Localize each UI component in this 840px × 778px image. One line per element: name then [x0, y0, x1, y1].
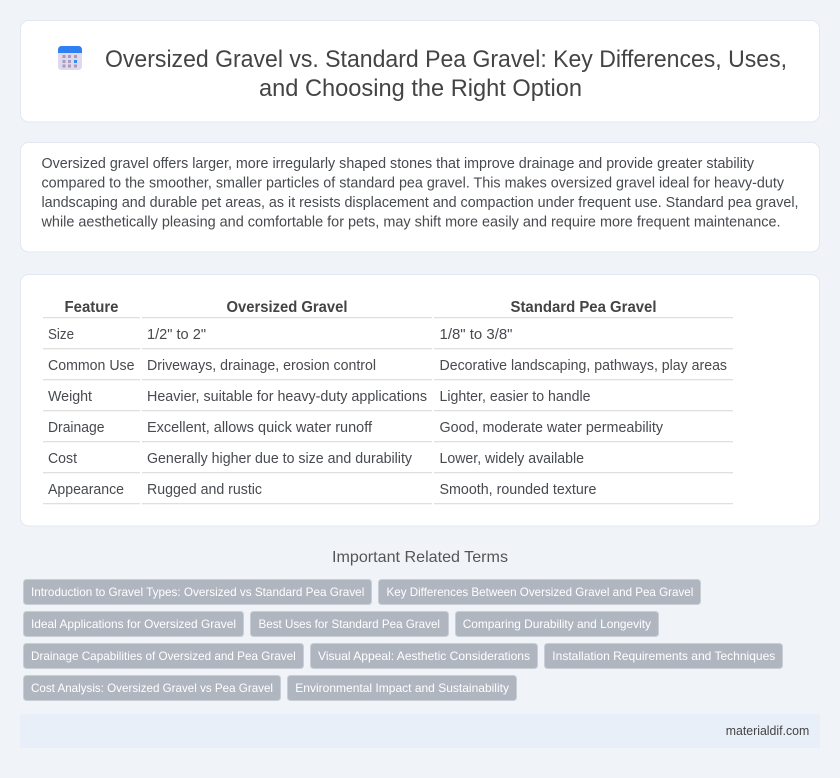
- tag: introduction: Introduction to Gravel Types: Oversized vs Standard Pea Gravel: [31, 585, 364, 599]
- text block: introduction paragraph: Oversized gravel offers larger, more irregularly shaped stones that improve drainage and provide greater stability: [42, 156, 755, 172]
- table row: cost: [48, 451, 584, 467]
- panel: title header: [20, 20, 820, 122]
- table header row: Oversized Gravel: [226, 299, 348, 316]
- footer: [20, 714, 820, 748]
- table header row: [64, 299, 656, 316]
- text block: introduction paragraph: [40, 156, 799, 230]
- tag: introduction: [24, 580, 372, 604]
- tag: ideal applications: [24, 612, 244, 636]
- table row: common use: [48, 358, 727, 374]
- tag: key differences: [378, 580, 700, 604]
- heading: important related terms: Important Related Terms: [332, 549, 508, 566]
- table row: size: 1/8" to 3/8": [440, 327, 512, 343]
- footer: materialdif.com: [726, 724, 809, 738]
- title: [105, 46, 787, 102]
- table row: size: [48, 327, 512, 343]
- table row: appearance: [48, 482, 596, 498]
- text block: introduction paragraph: compared to the smoother, smaller particles of standard pea gravel. This makes oversized gravel ideal for heavy-duty: [42, 176, 785, 192]
- tag: cost analysis: Cost Analysis: Oversized Gravel vs Pea Gravel: [31, 681, 273, 695]
- tag: drainage: Drainage Capabilities of Oversized and Pea Gravel: [31, 649, 296, 663]
- table row: drainage: Excellent, allows quick water runoff: [147, 420, 373, 436]
- table row: common use: Driveways, drainage, erosion control: [147, 358, 376, 374]
- text block: introduction paragraph: while aesthetically pleasing and comfortable for pets, may shift more easily and require more frequent maintenance.: [40, 214, 781, 230]
- table row: weight: Heavier, suitable for heavy-duty applications: [147, 389, 427, 405]
- tag: durability: Comparing Durability and Longevity: [463, 617, 651, 631]
- title: and Choosing the Right Option: [259, 75, 582, 102]
- table row: drainage: [48, 420, 664, 436]
- tag: installation: [544, 644, 782, 668]
- table header row: Standard Pea Gravel: [510, 299, 656, 316]
- table row: drainage: Good, moderate water permeability: [440, 420, 664, 436]
- table row: appearance: Appearance: [48, 482, 124, 498]
- tag: visual appeal: [310, 644, 538, 668]
- tag: environmental impact: Environmental Impact and Sustainability: [295, 681, 509, 695]
- table row: weight: Lighter, easier to handle: [440, 389, 590, 405]
- tag: durability: [456, 612, 658, 636]
- tag: environmental impact: [288, 676, 516, 700]
- panel: comparison table: [20, 274, 820, 526]
- table row: appearance: Rugged and rustic: [147, 482, 262, 498]
- tag: key differences: Key Differences Between Oversized Gravel and Pea Gravel: [386, 585, 693, 599]
- title: Oversized Gravel vs. Standard Pea Gravel: Key Differences, Uses,: [105, 46, 787, 73]
- table row: cost: Cost: [48, 451, 77, 467]
- table row: weight: [48, 389, 590, 405]
- tag: installation: Installation Requirements and Techniques: [552, 649, 775, 663]
- tag: drainage: [24, 644, 304, 668]
- icon: calendar: [58, 46, 82, 70]
- table row: cost: Lower, widely available: [440, 451, 584, 467]
- tag: best uses: Best Uses for Standard Pea Gravel: [258, 617, 440, 631]
- tag: ideal applications: Ideal Applications for Oversized Gravel: [31, 617, 236, 631]
- panel: introduction: [20, 142, 820, 252]
- table row: common use: Common Use: [48, 358, 134, 374]
- tag: visual appeal: Visual Appeal: Aesthetic Considerations: [318, 649, 530, 663]
- tag: best uses: [250, 612, 448, 636]
- text block: introduction paragraph: landscaping and durable pet areas, as it resists displacement and compaction under frequent use. Standard pea gravel,: [42, 195, 798, 211]
- table row: appearance: Smooth, rounded texture: [440, 482, 596, 498]
- table row: cost: Generally higher due to size and durability: [147, 451, 413, 467]
- table row: weight: Weight: [48, 389, 92, 405]
- table row: size: Size: [48, 327, 74, 343]
- table row: drainage: Drainage: [48, 420, 104, 436]
- table row: size: 1/2" to 2": [147, 327, 206, 343]
- tag: cost analysis: [24, 676, 280, 700]
- related terms tags: [24, 580, 782, 700]
- table header row: Feature: [64, 299, 119, 316]
- table row: common use: Decorative landscaping, pathways, play areas: [440, 358, 727, 374]
